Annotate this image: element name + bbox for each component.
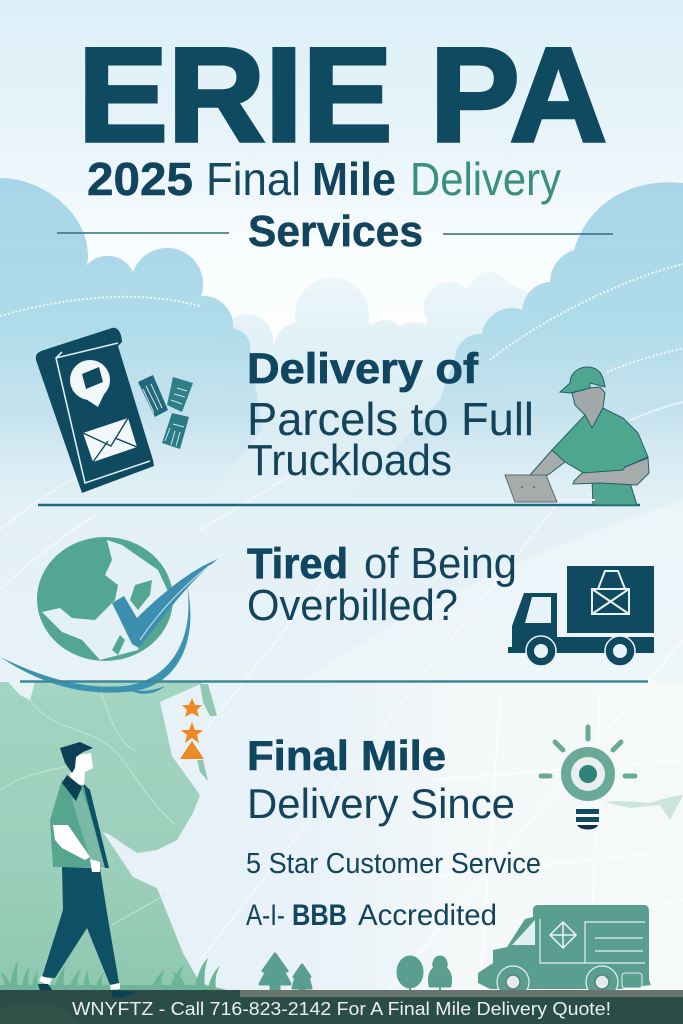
icon: small cards — [138, 375, 193, 449]
footer banner — [0, 990, 683, 1024]
figure: worker at laptop — [505, 367, 649, 505]
section 3 text: Accredited — [358, 899, 497, 932]
subtitle: Delivery — [410, 153, 561, 205]
title: ERIE PA — [78, 21, 607, 170]
icon: light bulb — [541, 727, 683, 830]
icon: globe with check mark — [0, 537, 218, 694]
icon: trees — [260, 954, 450, 992]
icon: delivery van — [478, 905, 651, 998]
section 1 text: Parcels to Full — [247, 393, 534, 445]
icon: book with pin and envelope — [36, 328, 154, 493]
subtitle — [87, 153, 561, 256]
section 2 text: of Being — [364, 539, 517, 588]
figure: walking man — [38, 742, 120, 998]
subtitle: 2025 — [87, 153, 193, 205]
divider 1 — [38, 504, 640, 506]
section 3 text: BBB — [292, 899, 347, 932]
section 3 text: Final Mile — [247, 732, 446, 779]
subtitle: Mile — [312, 153, 396, 205]
grass — [0, 958, 235, 992]
section 3 text — [246, 732, 541, 932]
section 3 text: 5 Star Customer Service — [246, 848, 541, 880]
map of coastline — [0, 682, 235, 992]
icon: delivery truck — [508, 566, 654, 666]
section 3 text: A-I- — [246, 899, 285, 932]
divider 2 — [20, 680, 648, 683]
icon: orange stars — [180, 698, 204, 759]
heading dividers — [57, 233, 613, 234]
section 3 text: Delivery Since — [247, 780, 515, 827]
section 1 text: Truckloads — [247, 436, 452, 485]
footer text: WNYFTZ - Call 716-823-2142 For A Final Mile Delivery Quote! — [72, 999, 611, 1019]
subtitle: Services — [248, 207, 423, 256]
section 2 text: Tired — [247, 540, 348, 588]
section 1 text — [247, 345, 534, 485]
subtitle: Final — [206, 153, 301, 205]
section 1 text: Delivery of — [247, 345, 479, 393]
section 2 text: Overbilled? — [247, 581, 458, 630]
section 2 text — [247, 539, 517, 630]
